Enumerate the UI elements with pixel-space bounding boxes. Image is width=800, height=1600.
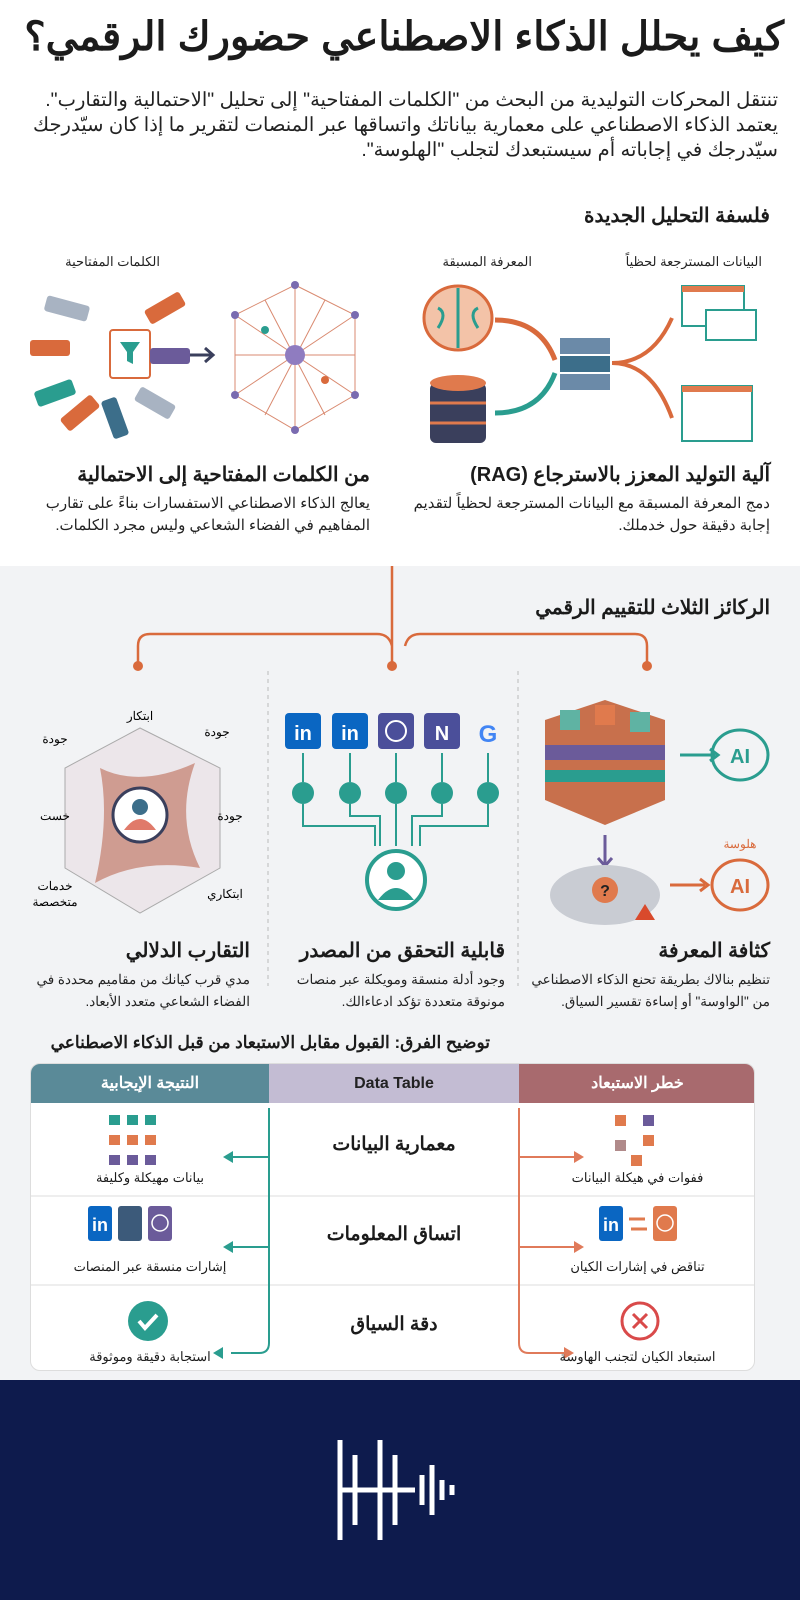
title: كيف يحلل الذكاء الاصطناعي حضورك الرقمي؟ bbox=[24, 15, 784, 59]
label: retrieved data: البيانات المسترجعة لحظياً bbox=[626, 254, 762, 269]
bracket connector bbox=[133, 566, 652, 986]
heading: three pillars: الركائز الثلاث للتقييم الرقمي bbox=[535, 597, 770, 619]
arrows bbox=[495, 320, 555, 360]
icon: tags and funnel bbox=[30, 291, 190, 440]
icon: semantic radar: ابتكار bbox=[126, 709, 153, 723]
icon: source verification bbox=[285, 713, 499, 911]
label: prior knowledge: المعرفة المسبقة bbox=[443, 254, 532, 269]
icon: semantic radar: خست bbox=[40, 809, 70, 823]
negative column: استبعاد الكيان لتجنب الهاوسة bbox=[559, 1349, 716, 1364]
intro text: سيّدرجك في إجاباته أم سيستبعدك لتجلب "الهلوسة". bbox=[361, 139, 778, 161]
negative column: ففوات في هيكلة البيانات bbox=[572, 1170, 703, 1185]
keywords to probability diagram bbox=[30, 281, 359, 439]
icon: knowledge density: AI bbox=[730, 746, 750, 768]
block: source verification: قابلية التحقق من المصدر bbox=[300, 940, 505, 962]
label: keywords: الكلمات المفتاحية bbox=[65, 254, 160, 269]
block: semantic proximity bbox=[36, 940, 250, 1010]
icon: brain bbox=[424, 286, 492, 350]
block: RAG: دمج المعرفة المسبقة مع البيانات المسترجعة لحظياً لتقديم إجابة دقيقة حول خدملك. bbox=[414, 495, 770, 534]
intro text: تنتقل المحركات التوليدية من البحث من "الكلمات المفتاحية" إلى تحليل "الاحتمالية والتقارب". bbox=[45, 89, 778, 111]
table header: Data Table bbox=[354, 1075, 434, 1092]
comparison table bbox=[30, 1063, 755, 1371]
block: source verification: وجود أدلة منسقة ومويكلة عبر منصات مونوقة متعددة تؤكد ادعاءالك. bbox=[297, 972, 505, 1009]
icon: semantic radar: جودة bbox=[42, 732, 68, 746]
block: knowledge density: تنظيم بنالاك بطريقة تحنع الذكاء الاصطناعي من "الواوسة" أو إساءة تقسير السياق. bbox=[531, 972, 770, 1009]
logo bbox=[338, 1440, 454, 1540]
block: keywords to probability bbox=[46, 464, 370, 534]
icon: semantic radar: متخصصة bbox=[32, 895, 78, 909]
intro text bbox=[33, 89, 778, 161]
negative column: in bbox=[603, 1215, 619, 1235]
icon: semantic radar bbox=[32, 709, 243, 914]
icon: database bbox=[430, 375, 486, 443]
block: semantic proximity: مدي قرب كيانك من مقاميم محددة في الفضاء الشعاعي متعدد الأبعاد. bbox=[36, 972, 250, 1009]
table title: توضيح الفرق: القبول مقابل الاستبعاد من قبل الذكاء الاصطناعي bbox=[51, 1033, 490, 1052]
block: knowledge density: كثافة المعرفة bbox=[658, 940, 770, 962]
panel: three pillars bbox=[0, 566, 800, 1380]
negative column bbox=[559, 1115, 716, 1364]
block: semantic proximity: التقارب الدلالي bbox=[126, 940, 250, 962]
positive column: استجابة دقيقة وموثوقة bbox=[89, 1349, 211, 1364]
RAG diagram bbox=[422, 284, 757, 443]
positive column bbox=[74, 1115, 226, 1364]
positive column: بيانات مهيكلة وكليفة bbox=[96, 1170, 204, 1185]
intro text: يعتمد الذكاء الاصطناعي على معمارية بياناتك واتساقها عبر المنصات لتقرير ما إذا كان سيّدرجك bbox=[33, 114, 778, 136]
icon: source verification: in bbox=[341, 723, 359, 745]
positive column: إشارات منسقة عبر المنصات bbox=[74, 1259, 226, 1274]
table header: النتيجة الإيجابية bbox=[101, 1075, 199, 1092]
icon: semantic radar: ابتكاري bbox=[207, 887, 243, 901]
comparison table: معمارية البيانات bbox=[332, 1134, 456, 1155]
footer bbox=[0, 1380, 800, 1600]
positive column: in bbox=[92, 1215, 108, 1235]
block: source verification bbox=[297, 940, 505, 1010]
icon: semantic radar: خدمات bbox=[37, 879, 73, 893]
icon: source verification: G bbox=[479, 721, 497, 748]
icon: semantic radar: جودة bbox=[204, 725, 230, 739]
heading: new philosophy: فلسفة التحليل الجديدة bbox=[584, 205, 770, 227]
table header: خطر الاستبعاد bbox=[591, 1075, 684, 1092]
icon: source verification: N bbox=[435, 723, 449, 745]
arrow bbox=[190, 348, 213, 362]
icon: server bbox=[560, 338, 610, 390]
row labels bbox=[327, 1134, 461, 1335]
block: keywords to probability: من الكلمات المفتاحية إلى الاحتمالية bbox=[77, 464, 370, 486]
table header bbox=[31, 1064, 754, 1103]
comparison table: اتساق المعلومات bbox=[327, 1224, 461, 1245]
icon: documents bbox=[682, 286, 756, 441]
block: knowledge density bbox=[531, 940, 770, 1010]
icon: knowledge density bbox=[545, 700, 770, 925]
comparison table: دقة السياق bbox=[350, 1314, 438, 1335]
icon: knowledge density: ? bbox=[600, 883, 610, 900]
block: keywords to probability: يعالج الذكاء الاصطناعي الاستفسارات بناءً على تقارب المفاهيم في الفضاء الشعاعي وليس مجرد الكلمات. bbox=[46, 495, 370, 534]
block: RAG: آلية التوليد المعزز بالاسترجاع (RAG) bbox=[470, 464, 770, 486]
icon: knowledge density: هلوسة bbox=[724, 837, 756, 851]
icon: network bbox=[235, 285, 355, 430]
icon: semantic radar: جودة bbox=[217, 809, 243, 823]
icon: source verification: in bbox=[294, 723, 312, 745]
block: RAG bbox=[414, 461, 772, 534]
negative column: تناقض في إشارات الكيان bbox=[570, 1259, 705, 1274]
icon: knowledge density: AI bbox=[730, 876, 750, 898]
